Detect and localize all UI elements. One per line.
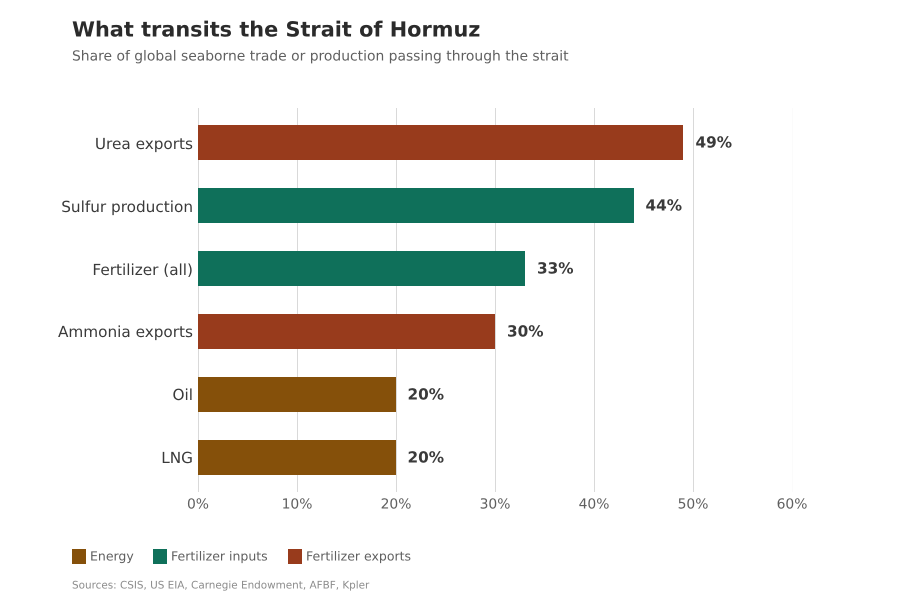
bar: Ammonia exports: 30%	[507, 322, 544, 340]
legend: Fertilizer inputs: Fertilizer inputs	[171, 548, 268, 564]
x axis labels: 10%	[282, 496, 312, 512]
legend: Fertilizer exports: Fertilizer exports	[306, 548, 411, 564]
bar: LNG: 20%	[408, 448, 444, 466]
bar: Urea exports	[95, 125, 732, 160]
bar: Urea exports: 49%	[696, 134, 732, 152]
x axis labels: 20%	[381, 496, 411, 512]
bar: Sulfur production: 44%	[646, 196, 682, 214]
subtitle: Share of global seaborne trade or production passing through the strait	[72, 48, 569, 64]
bar: Oil	[172, 377, 444, 412]
title: What transits the Strait of Hormuz	[72, 18, 480, 42]
sources note: Sources: CSIS, US EIA, Carnegie Endowment, AFBF, Kpler	[72, 580, 370, 592]
bar: Sulfur production	[61, 188, 682, 223]
x axis labels	[187, 496, 807, 512]
legend	[72, 548, 411, 564]
bar: Urea exports: Urea exports	[95, 135, 193, 153]
bar: Fertilizer (all): 33%	[537, 260, 574, 278]
legend: Energy	[72, 548, 134, 564]
bar: LNG	[161, 440, 444, 475]
x axis labels: 60%	[777, 496, 807, 512]
x axis labels: 30%	[480, 496, 510, 512]
x axis labels: 40%	[579, 496, 609, 512]
bar: Sulfur production: Sulfur production	[61, 198, 193, 216]
bar: LNG: LNG	[161, 449, 193, 467]
bar chart	[58, 125, 732, 475]
bar: Ammonia exports	[58, 314, 544, 349]
x axis labels: 50%	[678, 496, 708, 512]
bar: Ammonia exports: Ammonia exports	[58, 323, 193, 341]
bar: Oil: Oil	[172, 386, 193, 404]
bar: Fertilizer (all)	[92, 251, 574, 286]
bar: Fertilizer (all): Fertilizer (all)	[92, 261, 193, 279]
x axis labels: 0%	[187, 496, 209, 512]
legend: Energy: Energy	[90, 548, 134, 564]
bar: Oil: 20%	[408, 386, 444, 404]
